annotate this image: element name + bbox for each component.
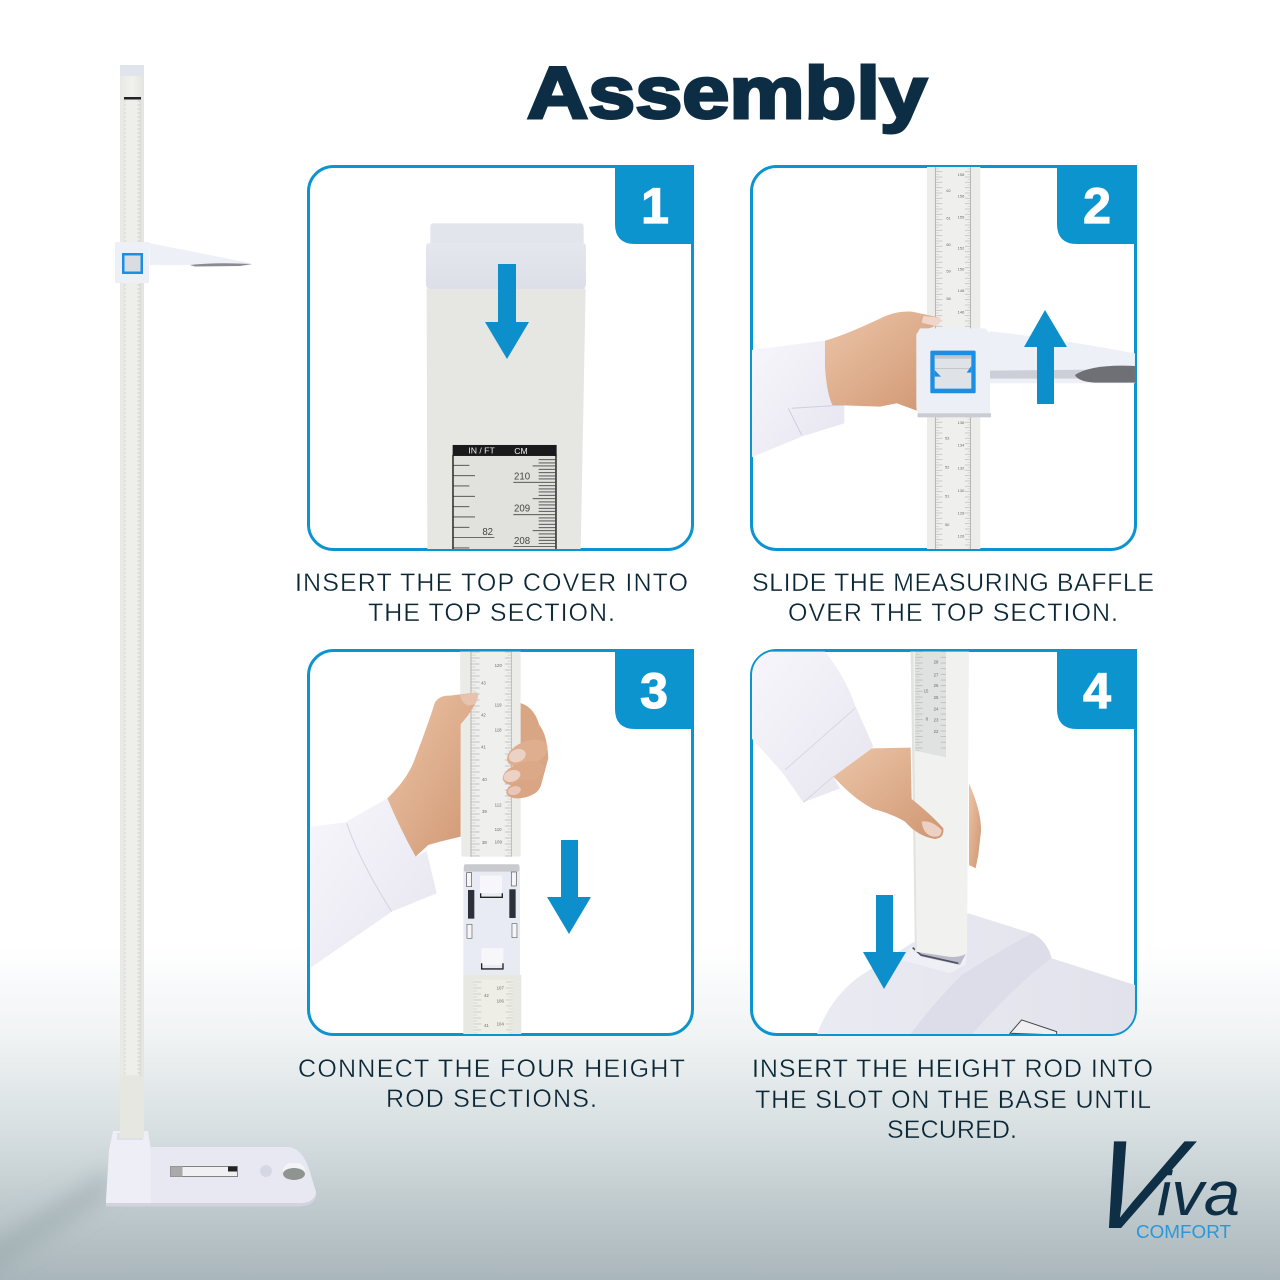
panel 2 photo: hand sliding baffle on rod: 152 [958, 245, 965, 250]
panel 1 frame [308, 166, 692, 550]
panel 4 photo: rod inserted into base slot: 26 [934, 683, 939, 688]
panel 3: connect rod sections [298, 649, 694, 1113]
panel 3 photo: hand joining rod sections [311, 652, 552, 1037]
panel 4 arrow: down [863, 895, 906, 989]
panel 2 photo: hand sliding baffle on rod: 52 [945, 464, 950, 469]
panel 2 photo: hand sliding baffle on rod: 155 [958, 215, 965, 220]
panel 4 number badge [1057, 649, 1137, 729]
panel 3 photo: hand joining rod sections: 39 [482, 809, 487, 814]
panel 1 photo: rod and top cover: 209 [514, 504, 530, 515]
panel 3 photo: hand joining rod sections: 112 [495, 803, 502, 808]
panel 1 photo: rod and top cover: 82 [482, 527, 493, 538]
panel 3 photo: hand joining rod sections: 118 [495, 728, 502, 733]
panel 2 caption: SLIDE THE MEASURING BAFFLE [752, 569, 1154, 597]
title: Assembly [527, 53, 927, 134]
panel 1 number badge: 1 [641, 178, 669, 234]
panel 2 arrow: up [1024, 310, 1067, 404]
panel 2 photo: hand sliding baffle on rod: 60 [946, 242, 952, 247]
panel 2 photo: hand sliding baffle on rod: 51 [945, 493, 950, 498]
panel 4 caption [752, 1055, 1153, 1144]
panel 1 photo: rod and top cover: CM [514, 446, 528, 456]
panel 3 photo: hand joining rod sections: 40 [482, 777, 487, 782]
panel 2 photo: hand sliding baffle on rod: 158 [958, 172, 965, 177]
panel 3 photo: hand joining rod sections: 119 [495, 703, 502, 708]
panel 4 photo: rod inserted into base slot [752, 652, 1135, 1035]
panel 2 photo: hand sliding baffle on rod: 156 [958, 193, 965, 198]
logo: Viva Comfort: iva [1157, 1160, 1240, 1229]
panel 2 photo: hand sliding baffle on rod: 53 [945, 435, 950, 440]
panel 2 photo: hand sliding baffle on rod: 59 [946, 269, 952, 274]
panel 3 photo: hand joining rod sections: 42 [484, 993, 489, 998]
logo: Viva Comfort: COMFORT [1136, 1222, 1231, 1242]
panel 1 photo: rod and top cover: 210 [514, 471, 530, 482]
product: full height rod stadiometer [106, 65, 316, 1206]
panel 3 caption: ROD SECTIONS. [386, 1085, 597, 1113]
panel 3 photo: hand joining rod sections: 43 [481, 680, 486, 685]
panel 1 number badge [615, 165, 694, 244]
panel 4 number badge: 4 [1083, 663, 1111, 719]
panel 3 arrow: down [547, 840, 591, 934]
logo: Viva Comfort: V [1060, 1115, 1210, 1256]
panel 2 caption [752, 569, 1154, 627]
panel 2: slide measuring baffle [752, 165, 1154, 627]
panel 4 photo: rod inserted into base slot: 23 [934, 718, 939, 723]
panel 1 caption: THE TOP SECTION. [368, 599, 615, 627]
rod ruler scale [124, 97, 141, 1076]
panel 3 photo: hand joining rod sections: 107 [497, 986, 504, 991]
panel 2 photo: hand sliding baffle on rod: 62 [946, 188, 952, 193]
panel 3 number badge [615, 649, 694, 729]
panel 2 photo: hand sliding baffle on rod: 146 [958, 309, 965, 314]
panel 2 photo: hand sliding baffle on rod: 128 [958, 511, 965, 516]
height rod [120, 76, 144, 1140]
panel 1 caption: INSERT THE TOP COVER INTO [295, 569, 688, 597]
panel 4 caption: INSERT THE HEIGHT ROD INTO [752, 1055, 1153, 1083]
panel 2 caption: OVER THE TOP SECTION. [788, 599, 1118, 627]
panel 4 photo: rod inserted into base slot: 24 [934, 706, 939, 711]
floor shadow [0, 1168, 110, 1280]
panel 1: insert top cover [295, 165, 694, 627]
panel 4: insert rod into base [752, 649, 1153, 1144]
panel 2 photo: hand sliding baffle on rod: 148 [958, 288, 965, 293]
panel 4 frame [752, 650, 1136, 1034]
panel 4 photo: rod inserted into base slot: 15 [924, 688, 929, 693]
panel 4 photo: rod inserted into base slot: 25 [934, 695, 939, 700]
panel 4 caption: THE SLOT ON THE BASE UNTIL [755, 1086, 1151, 1114]
panel 2 photo: hand sliding baffle on rod [752, 167, 1135, 550]
panel 2 photo: hand sliding baffle on rod: 130 [958, 488, 965, 493]
panel 2 number badge [1057, 165, 1137, 244]
panel 2 frame [752, 166, 1136, 550]
panel 2 number badge: 2 [1083, 178, 1111, 234]
panel 3 caption: CONNECT THE FOUR HEIGHT [298, 1055, 685, 1083]
panel 3 caption [298, 1055, 685, 1113]
panel 1 photo: rod and top cover: 208 [514, 536, 530, 547]
panel 3 photo: hand joining rod sections: 109 [495, 840, 502, 845]
panel 3 photo: hand joining rod sections: 41 [481, 744, 486, 749]
panel 1 caption [295, 569, 688, 627]
panel 1 arrow: down [485, 264, 529, 359]
panel 3 number badge: 3 [640, 663, 668, 719]
panel 4 caption: SECURED. [887, 1116, 1017, 1144]
panel 2 photo: hand sliding baffle on rod: 58 [946, 296, 952, 301]
measuring baffle [115, 242, 252, 283]
panel 3 photo: hand joining rod sections: 110 [495, 827, 502, 832]
panel 2 photo: hand sliding baffle on rod: 61 [946, 215, 952, 220]
panel 3 photo: hand joining rod sections: 38 [482, 840, 487, 845]
panel 2 photo: hand sliding baffle on rod: 136 [958, 420, 965, 425]
panel 3 photo: hand joining rod sections: 120 [495, 663, 502, 668]
panel 4 photo: rod inserted into base slot: 22 [934, 729, 939, 734]
panel 2 photo: hand sliding baffle on rod: 126 [958, 533, 965, 538]
panel 2 photo: hand sliding baffle on rod: 134 [958, 443, 965, 448]
panel 3 photo: hand joining rod sections: 41 [484, 1023, 489, 1028]
panel 1 photo: rod and top cover [426, 223, 586, 552]
panel 3 photo: hand joining rod sections: 106 [497, 998, 504, 1003]
panel 4 photo: rod inserted into base slot: 28 [934, 660, 939, 665]
panel 1 photo: rod and top cover: IN / FT [468, 446, 495, 456]
panel 3 frame [308, 650, 692, 1034]
panel 2 photo: hand sliding baffle on rod: 150 [958, 267, 965, 272]
panel 4 photo: rod inserted into base slot: 27 [934, 672, 939, 677]
panel 2 photo: hand sliding baffle on rod: 132 [958, 465, 965, 470]
panel 3 photo: hand joining rod sections: 42 [481, 713, 486, 718]
panel 2 photo: hand sliding baffle on rod: 50 [945, 522, 950, 527]
top cover [120, 65, 144, 76]
panel 4 photo: rod inserted into base slot: 8 [926, 716, 929, 721]
base [106, 1076, 316, 1206]
panel 3 photo: hand joining rod sections: 104 [497, 1022, 504, 1027]
